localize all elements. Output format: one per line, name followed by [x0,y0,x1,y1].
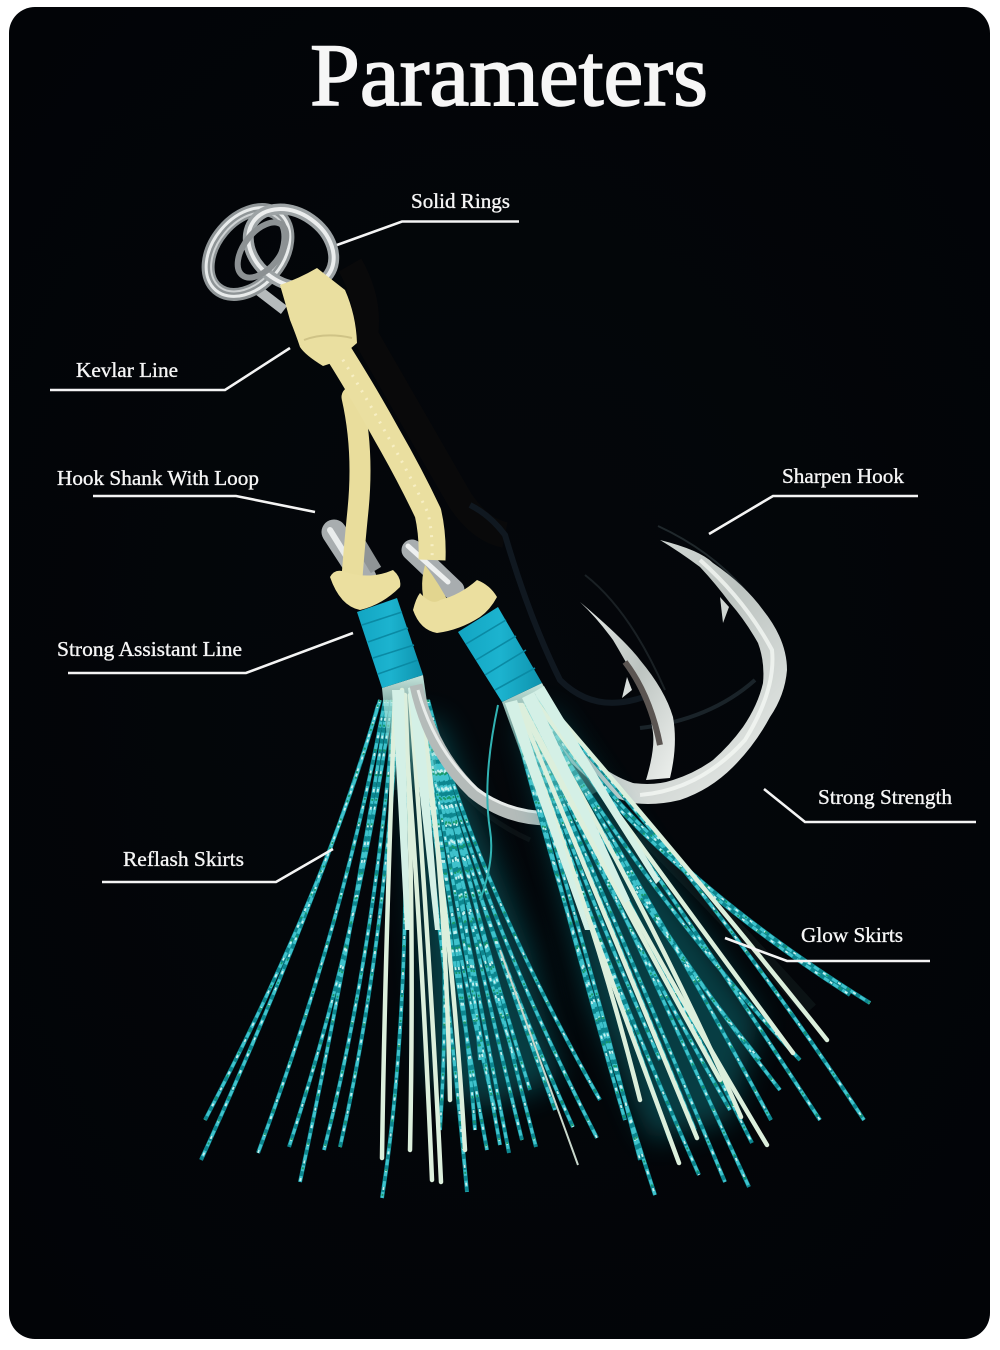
icon: big sharpened hook [515,540,787,804]
callout: Reflash Skirts: Reflash Skirts [123,847,244,871]
callout: Solid Rings [337,189,519,245]
callout: Solid Rings: Solid Rings [411,189,510,213]
callout: Reflash Skirts [102,847,333,882]
callout: Strong Assistant Line: Strong Assistant Line [57,637,242,661]
callout: Strong Assistant Line [57,633,353,673]
callout: Sharpen Hook: Sharpen Hook [782,464,905,488]
callout: Kevlar Line [50,348,290,390]
callout: Strong Strength: Strong Strength [818,785,953,809]
callout: Sharpen Hook [709,464,918,534]
callout: Hook Shank With Loop [57,466,315,512]
shadow: black cord and reflections behind the hooks [350,265,810,1010]
callout: Glow Skirts [725,923,930,961]
callout: Strong Strength [764,785,976,822]
callout: Kevlar Line: Kevlar Line [76,358,178,382]
reflash and glow skirts: right bundle [480,683,870,1195]
icon: blue thread wraps [357,598,542,702]
icon: left hook with small point [416,602,675,819]
icon: split rings [189,191,349,313]
title: Parameters [310,27,708,125]
callout: Glow Skirts: Glow Skirts [801,923,903,947]
icon: hook eye loops [330,530,454,590]
callout: Hook Shank With Loop: Hook Shank With Loop [57,466,259,490]
reflash skirts: left bundle [201,695,600,1198]
icon: kevlar line with knot [280,268,497,633]
glow skirts: left bundle [382,675,578,1182]
